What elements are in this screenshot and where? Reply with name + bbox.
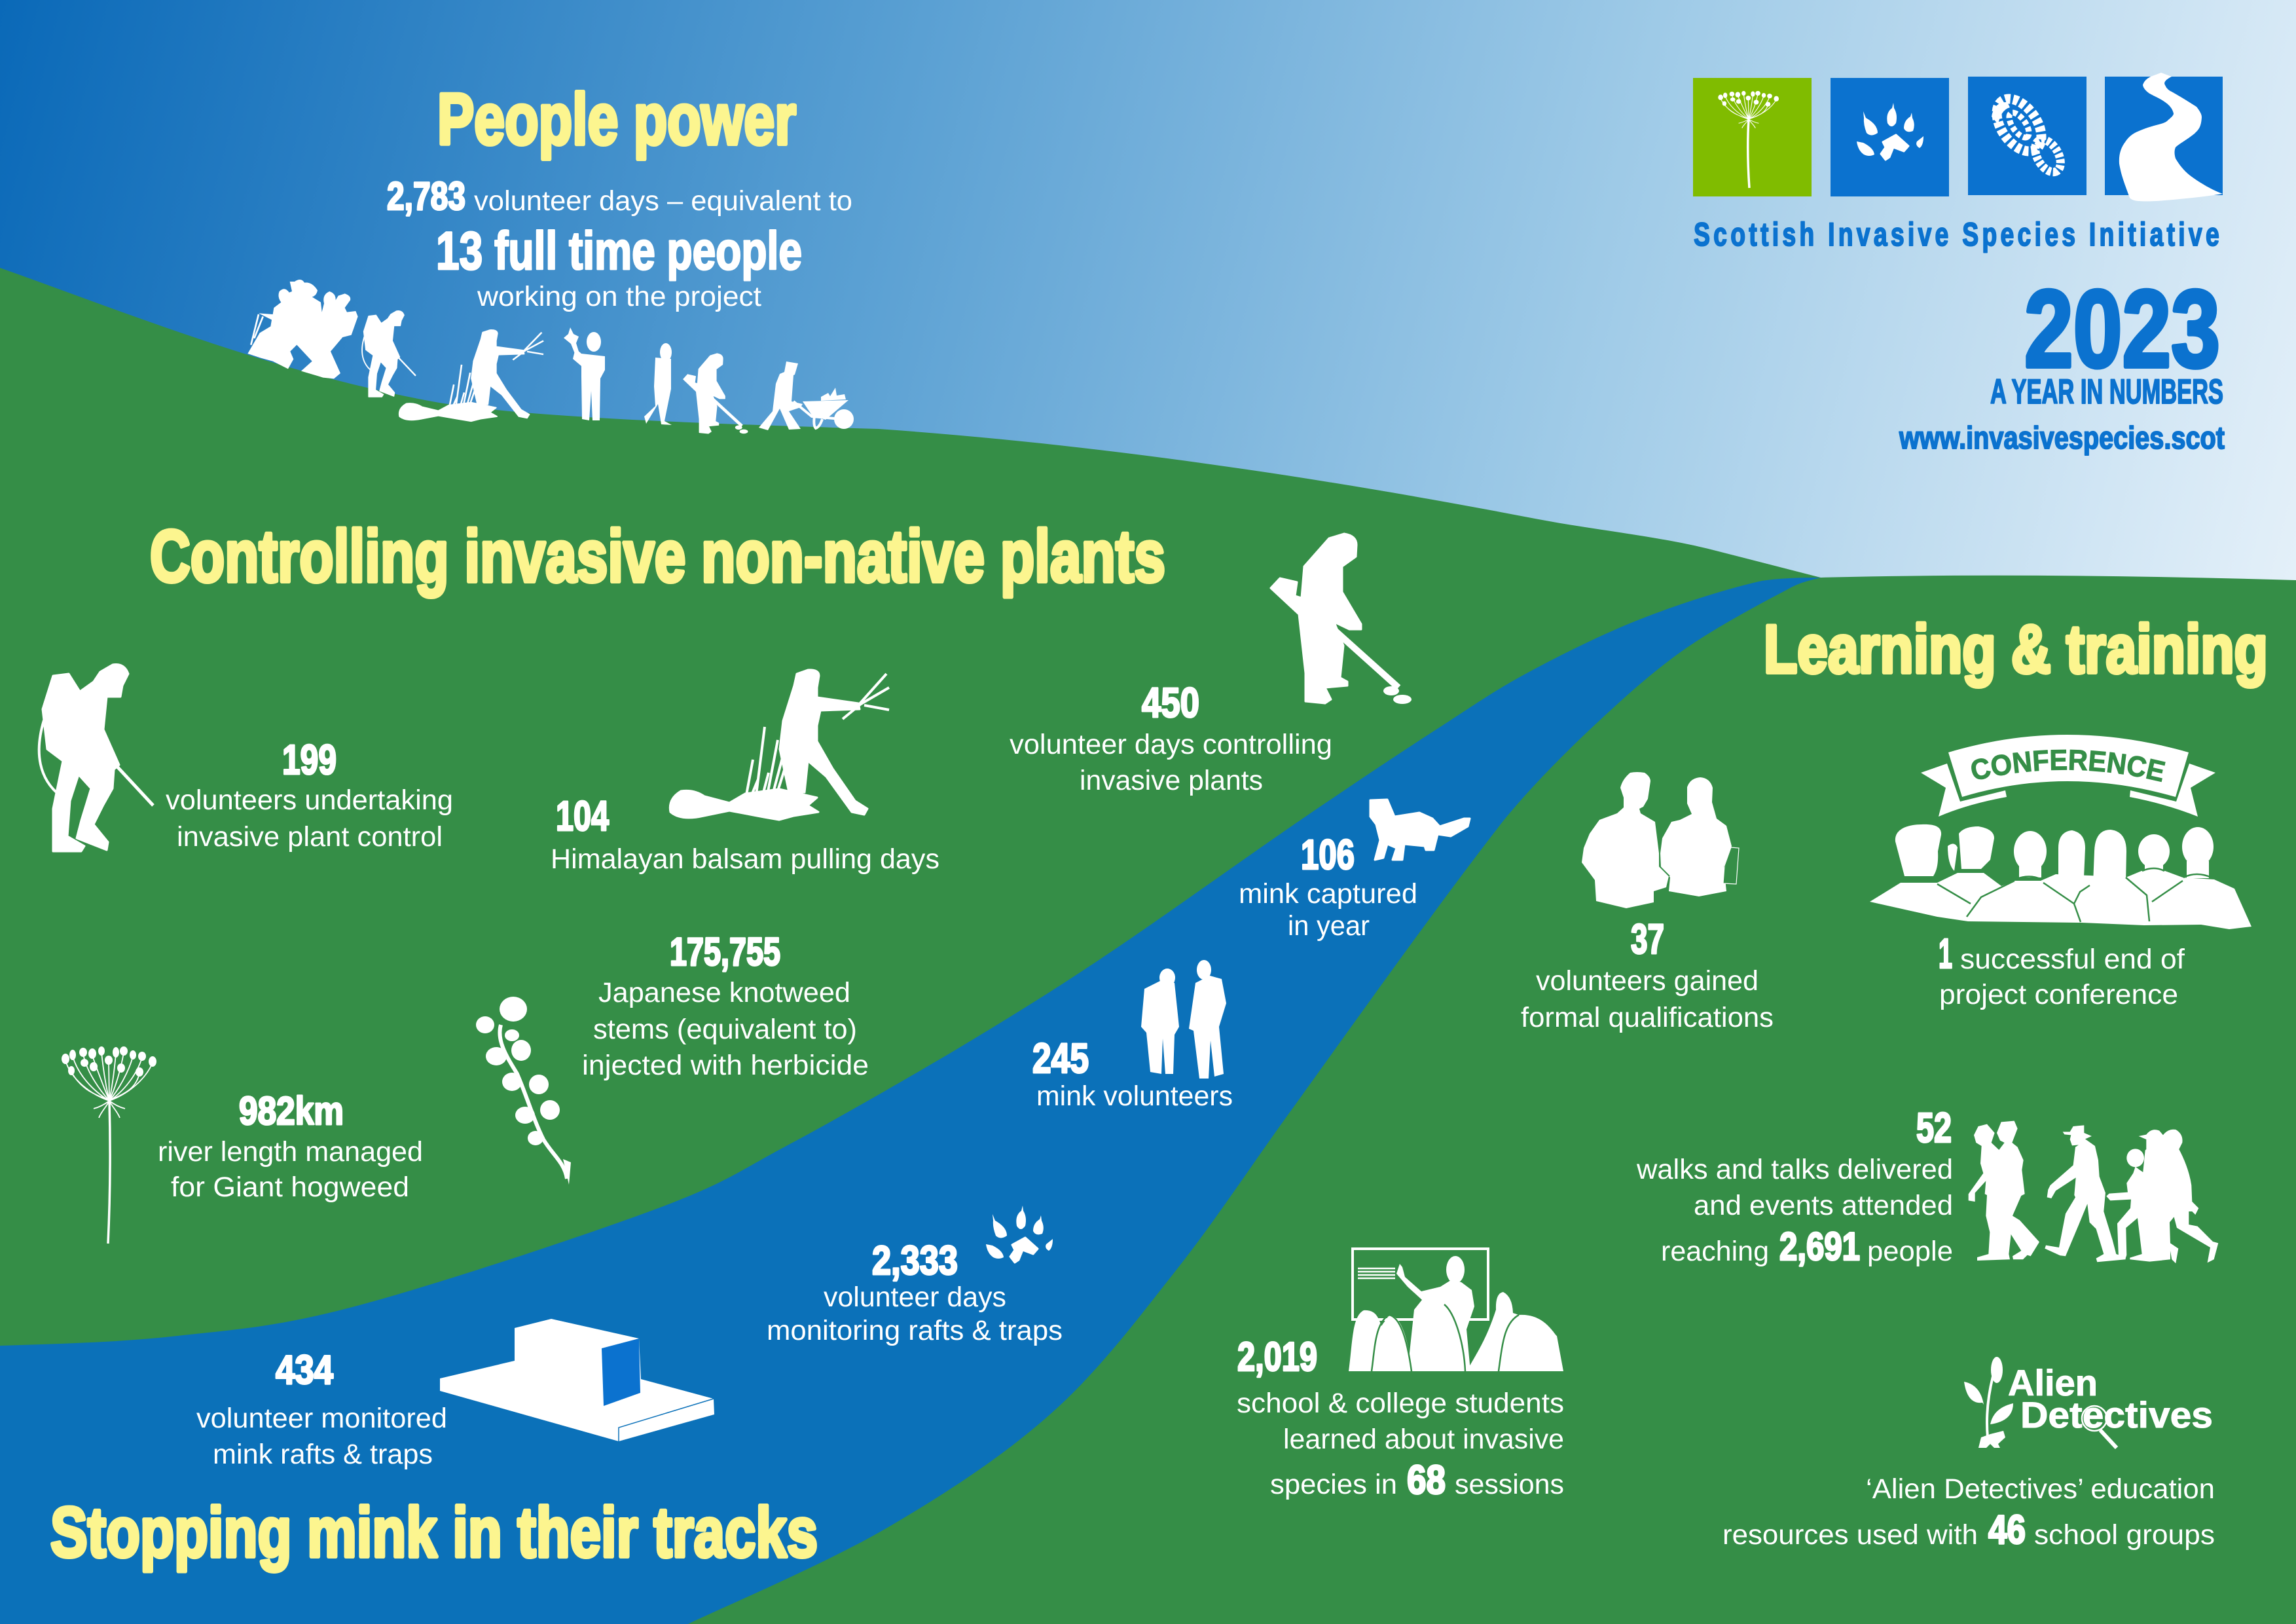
stat: 175,755 knotweed stems: 175,755 bbox=[670, 930, 780, 974]
icon: backpack sprayer bbox=[39, 665, 153, 851]
icon: person with wheelbarrow bbox=[759, 361, 854, 430]
year title: 2023 bbox=[2024, 267, 2220, 390]
stat: 52 walks and talks: people bbox=[1867, 1236, 1953, 1267]
stat: volunteer days: 13 full time people bbox=[436, 221, 802, 281]
stat: 450 volunteer days bbox=[1010, 679, 1332, 796]
stat: 175,755 knotweed stems: injected with herbicide bbox=[582, 1050, 869, 1081]
stat: 106 mink captured bbox=[1239, 831, 1417, 942]
stat: 1 conference bbox=[1939, 930, 2185, 1010]
audience bbox=[1870, 824, 2251, 929]
stat: volunteer days bbox=[387, 174, 852, 312]
stat: 982km river: river length managed bbox=[158, 1136, 423, 1168]
icon: conference banner and audience: CONFERENCE bbox=[1971, 749, 2166, 782]
stat: 37 qualifications: 37 bbox=[1631, 915, 1664, 963]
website: www.invasivespecies.scot bbox=[1899, 421, 2225, 456]
stat: 434 rafts: 434 bbox=[276, 1348, 333, 1393]
stat: 52 walks and talks bbox=[1636, 1104, 1953, 1268]
stat: 1 conference: project conference bbox=[1939, 979, 2178, 1010]
stat: 434 rafts: mink rafts & traps bbox=[213, 1439, 433, 1470]
icon: giant hogweed bbox=[62, 1046, 156, 1244]
logo tile: hogweed bbox=[1693, 78, 1812, 196]
logo tile: boot print bbox=[1968, 77, 2086, 195]
icon: two mink volunteers bbox=[1141, 960, 1226, 1079]
stat: 175,755 knotweed stems bbox=[582, 930, 869, 1081]
stat: 46 school groups bbox=[1722, 1473, 2215, 1553]
stat: 2,019 students: learned about invasive bbox=[1283, 1424, 1564, 1455]
heading: People power: People power bbox=[437, 79, 796, 160]
stat: 46 school groups: resources used with bbox=[1722, 1519, 1978, 1551]
icon: person with flowers bbox=[564, 327, 605, 420]
stat: 106 mink captured: mink captured bbox=[1239, 878, 1417, 910]
icon: mink raft bbox=[440, 1319, 714, 1441]
stat: 982km river: for Giant hogweed bbox=[171, 1172, 409, 1203]
stat: 2,333 volunteer days: monitoring rafts & traps bbox=[767, 1315, 1063, 1346]
icons: row of volunteers bbox=[247, 280, 854, 434]
banner bbox=[1921, 735, 2215, 817]
stat: 175,755 knotweed stems: Japanese knotweed bbox=[598, 977, 850, 1008]
stat: 46 school groups: 46 bbox=[1988, 1507, 2026, 1553]
stat: 106 mink captured: 106 bbox=[1301, 831, 1355, 878]
stat: 2,019 students bbox=[1237, 1335, 1564, 1503]
stat: 37 qualifications: formal qualifications bbox=[1521, 1002, 1774, 1033]
logo: Scottish Invasive Species Initiative bbox=[1693, 73, 2223, 253]
stat: 37 qualifications: volunteers gained bbox=[1536, 965, 1758, 997]
icon: sprayer volunteer bbox=[362, 311, 416, 397]
stat: 245 mink volunteers bbox=[1032, 1035, 1233, 1112]
icon: walking person bbox=[644, 343, 672, 425]
stat: 46 school groups: ‘Alien Detectives’ education bbox=[1866, 1473, 2215, 1505]
stat: 982km river bbox=[158, 1089, 423, 1203]
stat: 175,755 knotweed stems: stems (equivalent to) bbox=[593, 1014, 857, 1045]
icon: paw print bbox=[986, 1206, 1053, 1263]
icon: group of walkers bbox=[247, 280, 358, 378]
icon: mink bbox=[1370, 800, 1470, 860]
stat: 450 volunteer days: invasive plants bbox=[1080, 765, 1263, 796]
heading: Controlling invasive non-native plants: Controlling invasive non-native plants bbox=[150, 515, 1165, 597]
logo: Alien Detectives bbox=[1964, 1357, 2213, 1448]
logo: Alien Detectives: Detectives bbox=[2020, 1394, 2213, 1435]
stat: 199 volunteers: volunteers undertaking bbox=[166, 784, 453, 816]
logo tile: mink paw bbox=[1831, 78, 1949, 196]
stat: 199 volunteers bbox=[166, 736, 453, 853]
stat: 52 walks and talks: and events attended bbox=[1694, 1190, 1953, 1221]
stat: volunteer days: working on the project bbox=[477, 281, 761, 312]
stat: 199 volunteers: invasive plant control bbox=[177, 821, 443, 853]
stat: 2,019 students: sessions bbox=[1455, 1469, 1564, 1500]
logo: Alien Detectives: Alien bbox=[2008, 1362, 2098, 1403]
icon: teacher and class bbox=[1349, 1249, 1563, 1371]
stat: 104 balsam days: Himalayan balsam pulling days bbox=[551, 843, 939, 875]
stat: 245 mink volunteers: 245 bbox=[1032, 1035, 1089, 1082]
stat: 2,019 students: 68 bbox=[1407, 1458, 1446, 1503]
stat: 2,333 volunteer days: 2,333 bbox=[872, 1238, 958, 1283]
stat: 450 volunteer days: 450 bbox=[1142, 679, 1199, 726]
icon: two people with qualifications bbox=[1582, 772, 1739, 908]
icon: group walking bbox=[1969, 1121, 2218, 1263]
icon: knotweed bbox=[476, 997, 571, 1185]
stat: 52 walks and talks: reaching bbox=[1661, 1236, 1769, 1267]
stat: 2,333 volunteer days: volunteer days bbox=[824, 1282, 1006, 1313]
stat: 46 school groups: school groups bbox=[2034, 1519, 2215, 1551]
stat: 104 balsam days bbox=[551, 792, 939, 875]
stat: volunteer days: 2,783 bbox=[387, 174, 465, 218]
stat: 245 mink volunteers: mink volunteers bbox=[1036, 1080, 1233, 1112]
icon: conference banner and audience bbox=[1870, 735, 2251, 929]
river bbox=[0, 578, 1821, 1624]
icon: strimmer bbox=[1271, 534, 1412, 704]
logo tile: river bbox=[2105, 73, 2223, 201]
stat: 2,333 volunteer days bbox=[767, 1238, 1063, 1346]
stat: 2,019 students: school & college students bbox=[1237, 1388, 1564, 1419]
stat: 1 conference: successful end of bbox=[1960, 944, 2185, 975]
stat: 199 volunteers: 199 bbox=[282, 736, 337, 783]
stat: 450 volunteer days: volunteer days controlling bbox=[1010, 729, 1332, 760]
icon: balsam puller bbox=[399, 330, 543, 421]
stat: 2,019 students: 2,019 bbox=[1237, 1335, 1317, 1380]
stat: 982km river: 982km bbox=[239, 1089, 344, 1133]
stat: 37 qualifications bbox=[1521, 915, 1774, 1033]
icon: strimmer volunteer bbox=[683, 354, 748, 434]
stat: 434 rafts bbox=[196, 1348, 447, 1470]
icon: balsam pulling bbox=[670, 670, 889, 820]
stat: 52 walks and talks: 2,691 bbox=[1779, 1225, 1860, 1268]
stat: 1 conference: 1 bbox=[1939, 930, 1952, 977]
stat: 52 walks and talks: 52 bbox=[1916, 1104, 1952, 1151]
stat: 104 balsam days: 104 bbox=[556, 792, 609, 840]
stat: 2,019 students: species in bbox=[1270, 1469, 1397, 1500]
stat: 434 rafts: volunteer monitored bbox=[196, 1403, 447, 1434]
stat: 52 walks and talks: walks and talks delivered bbox=[1636, 1154, 1953, 1185]
stat: volunteer days: volunteer days – equivalent to bbox=[474, 185, 852, 217]
stat: 106 mink captured: in year bbox=[1288, 910, 1370, 942]
heading: Stopping mink in their tracks: Stopping mink in their tracks bbox=[50, 1492, 818, 1572]
